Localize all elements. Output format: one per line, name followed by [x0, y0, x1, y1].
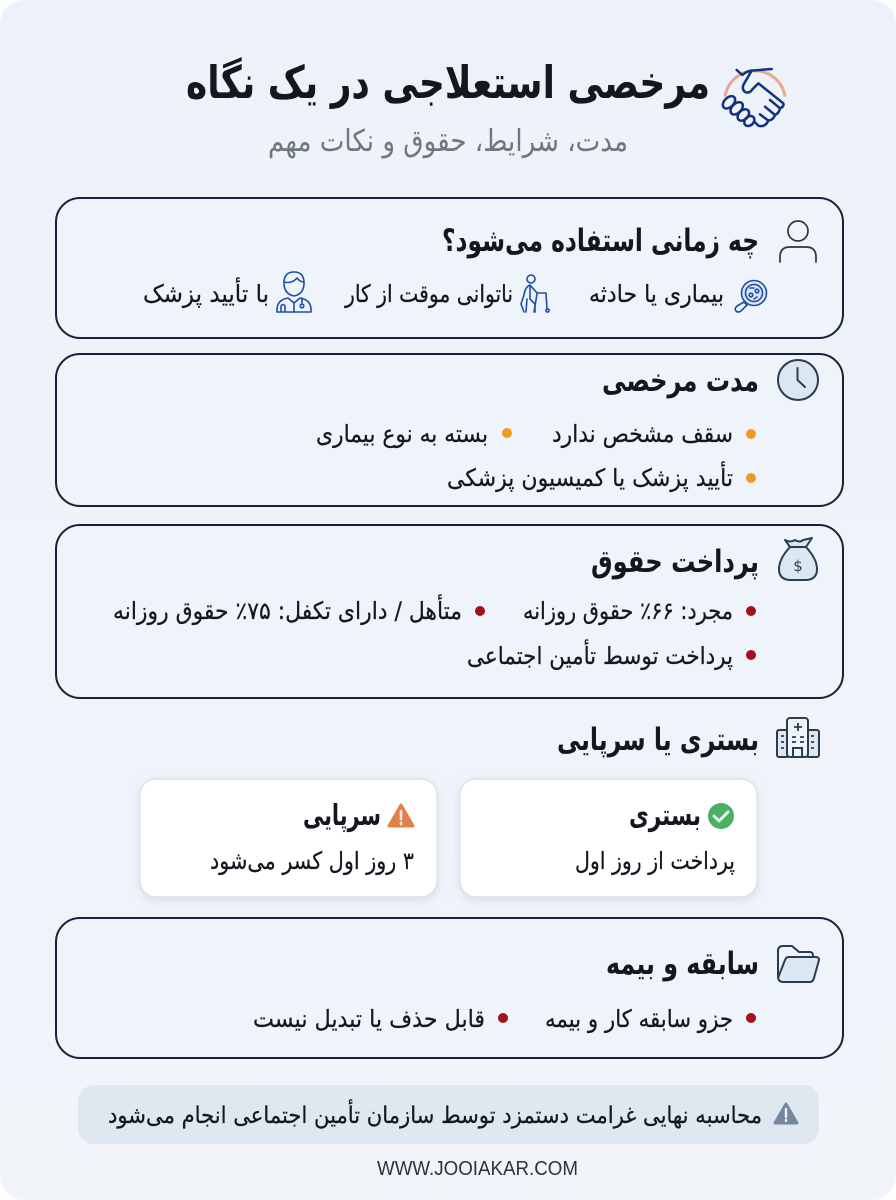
outpatient title: سرپایی — [303, 798, 381, 833]
bullet — [502, 428, 512, 438]
section: inpatient or outpatient — [140, 718, 819, 897]
item: temporary disability: ناتوانی موقت از کار — [344, 280, 513, 308]
inpatient description: پرداخت از روز اول — [575, 847, 735, 875]
icon: hospital — [777, 718, 819, 757]
text: no fixed ceiling: سقف مشخص ندارد — [552, 420, 733, 448]
heading: inpatient or outpatient: بستری یا سرپایی — [557, 722, 759, 758]
panel: when used — [56, 198, 843, 338]
bullet — [498, 1013, 508, 1023]
callout: final calculation note — [78, 1085, 819, 1144]
icon: handshake — [721, 69, 785, 128]
icon: doctor — [277, 272, 311, 312]
panel: leave duration — [56, 354, 843, 506]
bullet — [746, 606, 756, 616]
text: counts as record: جزو سابقه کار و بیمه — [545, 1005, 733, 1033]
icon: warning triangle — [389, 805, 413, 826]
bullet — [475, 606, 485, 616]
bullet — [746, 473, 756, 483]
text: married rate: متأهل / دارای تکفل: ۷۵٪ حقوق روزانه — [113, 594, 462, 625]
icon: warning triangle — [775, 1104, 797, 1123]
header — [186, 56, 785, 159]
text: depends on illness: بسته به نوع بیماری — [316, 420, 488, 448]
bullet — [746, 429, 756, 439]
subtitle: مدت، شرایط، حقوق و نکات مهم — [268, 124, 628, 159]
icon: magnifier with germs — [735, 280, 766, 312]
icon: money bag: $ — [793, 557, 803, 575]
icon: money bag — [779, 538, 817, 580]
item: illness or accident: بیماری یا حادثه — [589, 280, 724, 308]
panel: record and insurance — [56, 918, 843, 1058]
heading: leave duration: مدت مرخصی — [602, 363, 759, 399]
item: doctor approval — [143, 272, 311, 312]
heading: salary payment: پرداخت حقوق — [591, 544, 759, 580]
outpatient description: ۳ روز اول کسر می‌شود — [210, 847, 414, 875]
text: physician approval: تأیید پزشک یا کمیسیون پزشکی — [447, 461, 733, 492]
bullet — [746, 1013, 756, 1023]
text: cannot be removed: قابل حذف یا تبدیل نیست — [253, 1005, 485, 1033]
card: outpatient — [140, 779, 437, 897]
icon: person — [780, 221, 816, 262]
icon: person with walker — [521, 275, 549, 312]
item: doctor approval: با تأیید پزشک — [143, 277, 269, 308]
panel: salary payment — [56, 525, 843, 698]
inpatient title: بستری — [629, 798, 701, 832]
icon: clock — [778, 360, 818, 400]
card: inpatient — [460, 779, 757, 897]
text: paid by social security: پرداخت توسط تأمین اجتماعی — [467, 639, 733, 670]
icon: folder — [778, 946, 819, 982]
footer website: WWW.JOOIAKAR.COM — [377, 1158, 578, 1180]
title: مرخصی استعلاجی در یک نگاه — [186, 56, 710, 109]
text: single rate: مجرد: ۶۶٪ حقوق روزانه — [523, 597, 733, 625]
note text: محاسبه نهایی غرامت دستمزد توسط سازمان تأمین اجتماعی انجام می‌شود — [108, 1099, 762, 1129]
heading: record and insurance: سابقه و بیمه — [606, 946, 759, 982]
heading: when used: چه زمانی استفاده می‌شود؟ — [442, 223, 759, 259]
icon: green check — [708, 803, 734, 829]
bullet — [746, 650, 756, 660]
